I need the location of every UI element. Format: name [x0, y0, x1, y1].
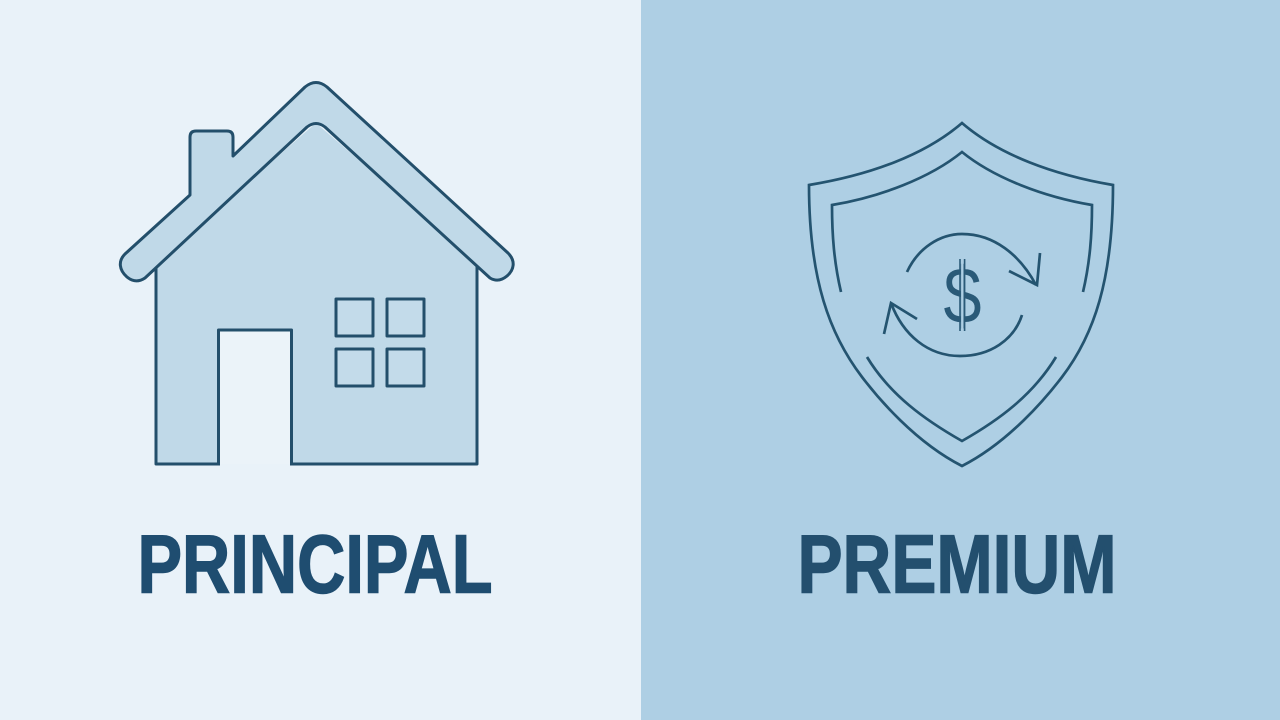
icon: shield with dollar	[809, 123, 1113, 466]
window panes	[336, 299, 424, 386]
heading: premium: PREMIUM	[798, 518, 1116, 610]
icon: house	[120, 82, 513, 464]
roof and chimney	[120, 82, 513, 281]
panel: principal background	[0, 0, 641, 720]
shield outer outline	[809, 123, 1113, 466]
panel: premium background	[641, 0, 1280, 720]
dollar sign double bar	[960, 259, 965, 331]
heading: principal: PRINCIPAL	[138, 518, 492, 610]
icon: dollar sign: $	[944, 251, 982, 340]
shield inner bottom outline	[867, 357, 1056, 441]
cycle arrowhead: top	[1009, 253, 1040, 285]
cycle arrow: top	[907, 234, 1036, 285]
door	[218, 330, 292, 464]
house wall fill	[156, 123, 477, 464]
cycle arrow: bottom	[891, 303, 1022, 356]
cycle arrowhead: bottom	[884, 303, 917, 334]
house wall outline	[156, 262, 477, 464]
shield inner top outline	[832, 152, 1092, 292]
